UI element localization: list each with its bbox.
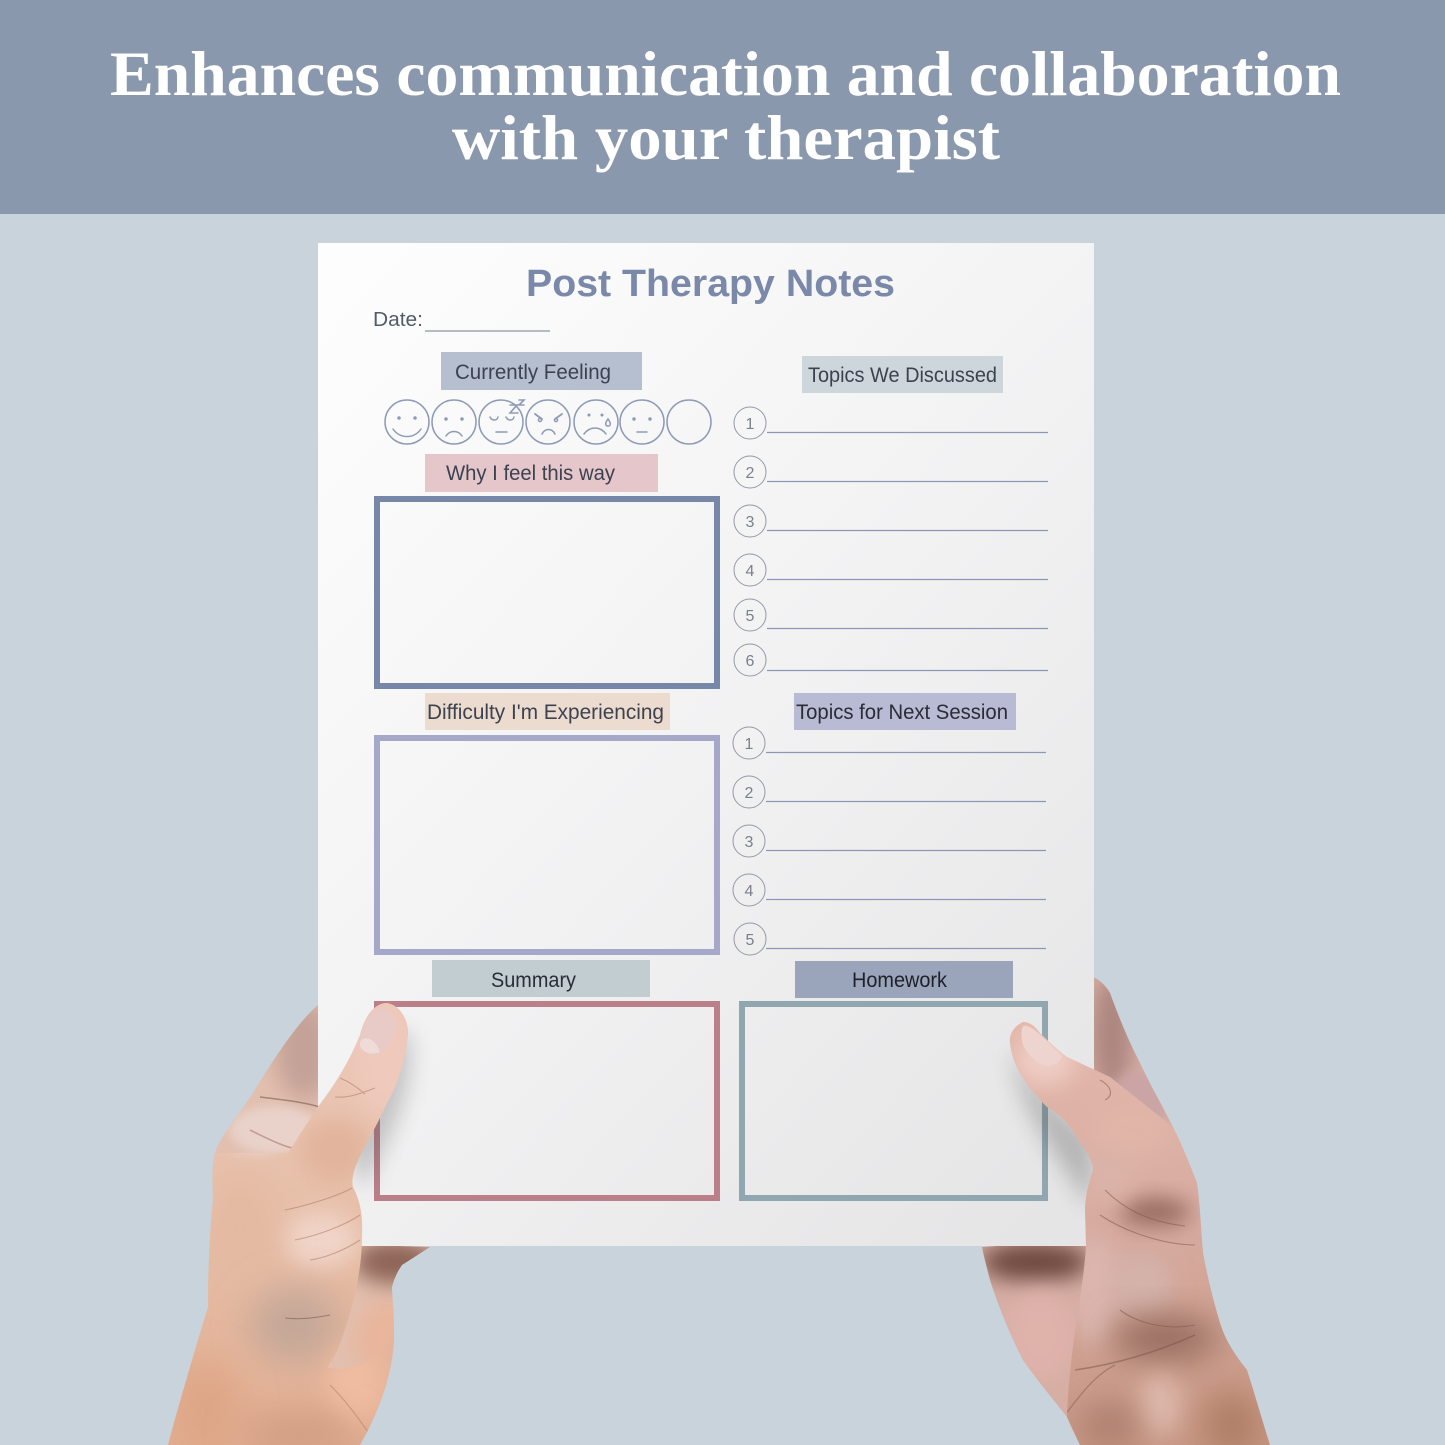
left hand: thumb and palm [160,995,420,1445]
left hand: fingers behind the sheet [168,1005,430,1445]
box: why I feel this way [377,499,717,686]
right hand: thumb and palm [1000,1015,1280,1445]
list: topics for next session [733,727,1046,955]
label: topics we discussed: Topics We Discussed [808,364,997,387]
title: Enhances communication and collaboration [110,38,1341,109]
icon: blank face [667,400,711,444]
list: topics we discussed: 4 [746,563,755,580]
label: summary [432,960,650,997]
list: topics for next session: 2 [745,785,754,802]
label: topics we discussed [802,356,1003,393]
title: with your therapist [452,102,1001,173]
icon: angry face [526,400,570,444]
box: summary [377,1004,717,1198]
icon: left thumbnail [360,1009,397,1055]
list: topics we discussed: 3 [746,514,755,531]
icon: neutral face [620,400,664,444]
panel: worksheet sheet [318,243,1094,1246]
list: topics we discussed [734,407,1048,676]
right hand: fingers behind the sheet [975,970,1275,1445]
label: homework: Homework [852,969,947,992]
label: topics for next session: Topics for Next Session [796,701,1008,724]
header banner [0,0,1445,214]
icon: sleepy face [479,400,524,444]
box: difficulty [377,738,717,952]
label: currently feeling: Currently Feeling [455,361,611,384]
label: homework [795,961,1013,998]
list: topics for next session: 3 [745,834,754,851]
date field: Date: [373,309,423,331]
label: topics for next session [794,693,1016,730]
list: topics for next session: 5 [746,932,755,949]
list: topics we discussed: 2 [746,465,755,482]
icon: happy face [385,400,429,444]
list: topics we discussed: 1 [746,416,755,433]
icon: crying face [574,400,618,444]
label: summary: Summary [491,969,576,992]
feeling faces [385,400,711,444]
label: difficulty: Difficulty I'm Experiencing [427,701,664,724]
list: topics we discussed: 5 [746,608,755,625]
label: why I feel this way: Why I feel this way [446,462,615,485]
title [110,38,1341,173]
worksheet title: Post Therapy Notes [526,263,895,305]
icon: sad face [432,400,476,444]
label: difficulty [425,693,670,730]
box: homework [742,1004,1045,1198]
list: topics for next session: 1 [745,736,754,753]
label: currently feeling [441,352,642,390]
list: topics we discussed: 6 [746,653,755,670]
icon: right thumbnail [1022,1026,1062,1066]
thumb shadows on the sheet [345,1030,1094,1210]
list: topics for next session: 4 [745,883,754,900]
label: why I feel this way [425,454,658,492]
